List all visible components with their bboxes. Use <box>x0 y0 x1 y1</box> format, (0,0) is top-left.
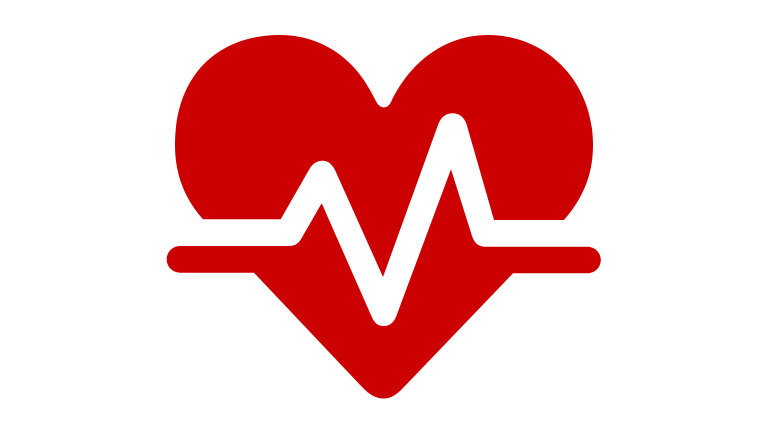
upper heart lobes <box>175 35 593 277</box>
icon: heart with pulse line <box>167 35 601 398</box>
lower heart with pulse tail <box>167 169 601 398</box>
